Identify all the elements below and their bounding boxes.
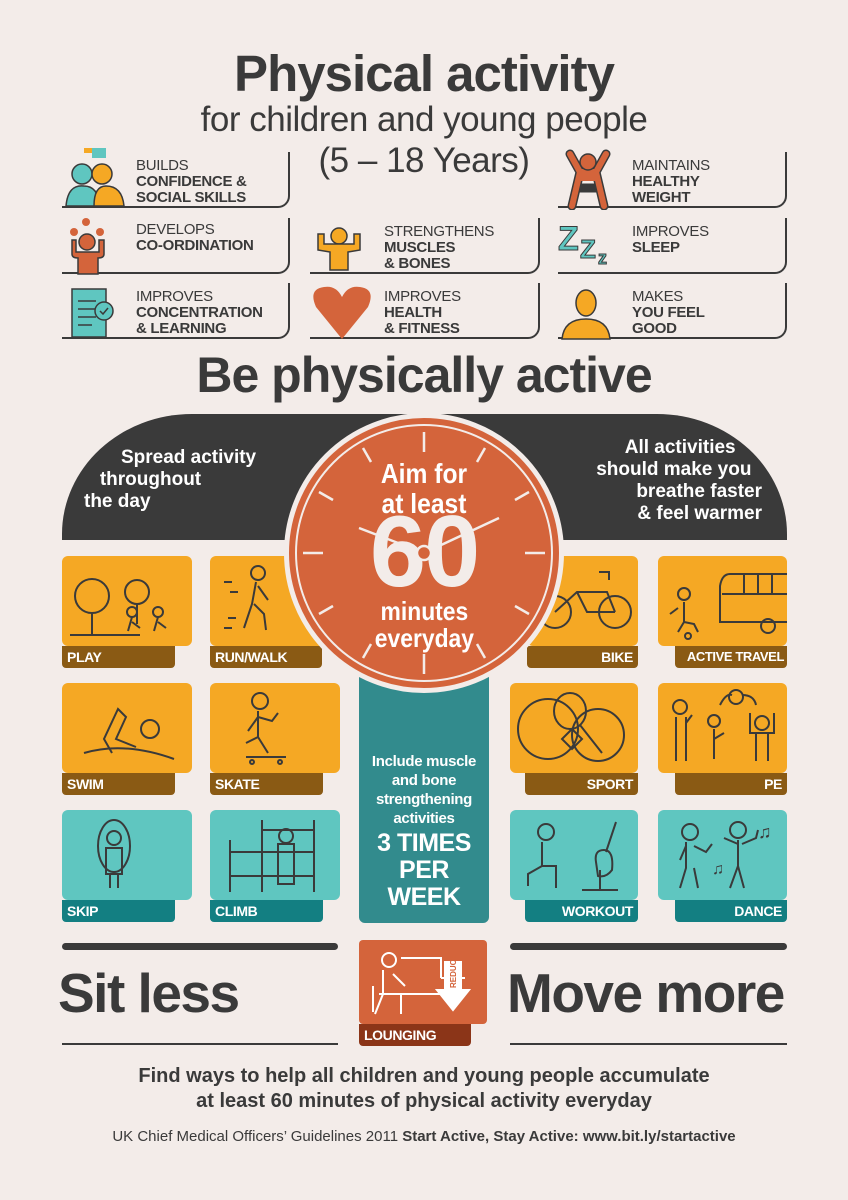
benefit: health: HEALTH bbox=[384, 304, 442, 321]
subtitle bbox=[201, 100, 647, 180]
subtitle: (5 – 18 Years) bbox=[319, 141, 529, 180]
benefit: concentration: CONCENTRATION bbox=[136, 304, 263, 321]
benefit: sleep: Z bbox=[580, 234, 596, 264]
footer message: Find ways to help all children and young people accumulate bbox=[138, 1065, 710, 1087]
subtitle: for children and young people bbox=[201, 100, 647, 139]
text: spread activity: the day bbox=[84, 491, 151, 512]
benefit: weight: WEIGHT bbox=[632, 189, 690, 206]
benefit: weight bbox=[558, 152, 787, 208]
benefit: coordination bbox=[62, 218, 290, 274]
benefit: sleep: z bbox=[598, 248, 607, 268]
title: Physical activity bbox=[234, 45, 614, 102]
tile: play: PLAY bbox=[67, 649, 101, 665]
tile: skip: SKIP bbox=[67, 903, 98, 919]
benefit: sleep: SLEEP bbox=[632, 239, 680, 256]
benefit: confidence bbox=[62, 152, 290, 208]
benefit: confidence: SOCIAL SKILLS bbox=[136, 189, 246, 206]
text: all activities: All activities bbox=[625, 437, 736, 458]
panel: muscle and bone strengthening: Include muscle bbox=[372, 753, 476, 770]
panel: muscle and bone strengthening: and bone bbox=[392, 772, 456, 789]
tile: swim bbox=[62, 683, 192, 795]
credits: UK Chief Medical Officers’ Guidelines 2011 Start Active, Stay Active: www.bit.ly/startactive bbox=[112, 1128, 736, 1145]
tile: skip bbox=[62, 810, 192, 922]
benefit: health bbox=[310, 283, 540, 339]
tile: bike bbox=[527, 556, 638, 668]
heading: move more: Move more bbox=[507, 962, 784, 1024]
tile: run/walk: RUN/WALK bbox=[215, 649, 287, 665]
tile: swim: SWIM bbox=[67, 776, 104, 792]
benefit: feel good: YOU FEEL bbox=[632, 304, 705, 321]
tile: play bbox=[62, 556, 192, 668]
benefit: concentration: IMPROVES bbox=[136, 288, 213, 305]
tile: dance: DANCE bbox=[734, 903, 782, 919]
tile: climb: CLIMB bbox=[215, 903, 257, 919]
clock: aim for 60 minutes bbox=[284, 413, 564, 693]
benefit: feel good: MAKES bbox=[632, 288, 683, 305]
clock: aim for 60 minutes: at least bbox=[382, 488, 466, 519]
tile: pe: PE bbox=[764, 776, 782, 792]
benefit: sleep bbox=[558, 218, 787, 274]
dark arch panel bbox=[62, 414, 787, 540]
tile: pe bbox=[658, 683, 787, 795]
panel: muscle and bone strengthening: strengthening bbox=[376, 791, 472, 808]
tile: dance: ♫ bbox=[758, 822, 772, 842]
panel: muscle and bone strengthening: WEEK bbox=[388, 883, 460, 911]
benefit: weight: MAINTAINS bbox=[632, 157, 710, 174]
panel: muscle and bone strengthening: PER bbox=[399, 856, 449, 884]
benefit: muscles: & BONES bbox=[384, 255, 450, 272]
benefit: muscles: STRENGTHENS bbox=[384, 223, 494, 240]
tile: active travel bbox=[658, 556, 787, 668]
tile: lounging: LOUNGING bbox=[364, 1027, 436, 1043]
benefit: sleep: Z bbox=[558, 220, 579, 258]
text: spread activity: Spread activity bbox=[121, 447, 256, 468]
tile: skate bbox=[210, 683, 340, 795]
benefit: confidence: CONFIDENCE & bbox=[136, 173, 247, 190]
footer message: at least 60 minutes of physical activity everyday bbox=[196, 1090, 652, 1112]
tile: lounging: REDUCE bbox=[449, 954, 458, 988]
benefit: coordination: CO-ORDINATION bbox=[136, 237, 253, 254]
text: all activities: should make you bbox=[596, 459, 751, 480]
benefit: health: IMPROVES bbox=[384, 288, 461, 305]
tile: lounging bbox=[359, 940, 487, 1046]
benefit: confidence: BUILDS bbox=[136, 157, 188, 174]
tile: sport bbox=[510, 683, 638, 795]
tile: bike: BIKE bbox=[601, 649, 633, 665]
benefit: muscles bbox=[310, 218, 540, 274]
footer message bbox=[138, 1065, 710, 1112]
heading: sit less: Sit less bbox=[58, 962, 239, 1024]
clock: aim for 60 minutes: minutes bbox=[380, 596, 468, 626]
text: all activities bbox=[596, 437, 762, 524]
benefit: feel good bbox=[558, 283, 787, 339]
tile: workout: WORKOUT bbox=[562, 903, 633, 919]
panel: muscle and bone strengthening: activities bbox=[393, 810, 455, 827]
tile: active travel: ACTIVE TRAVEL bbox=[687, 649, 784, 664]
benefit: coordination: DEVELOPS bbox=[136, 221, 214, 238]
benefit: weight: HEALTHY bbox=[632, 173, 700, 190]
tile: dance bbox=[658, 810, 787, 922]
heading: be physically active: Be physically active bbox=[196, 347, 652, 403]
clock: aim for 60 minutes: everyday bbox=[374, 623, 474, 653]
benefit: feel good: GOOD bbox=[632, 320, 677, 337]
tile: run/walk bbox=[210, 556, 322, 668]
benefit: concentration: & LEARNING bbox=[136, 320, 226, 337]
text: all activities: & feel warmer bbox=[637, 503, 762, 524]
clock: aim for 60 minutes: 60 bbox=[370, 496, 478, 608]
tile: workout bbox=[510, 810, 638, 922]
rules bbox=[62, 943, 338, 950]
tile: sport: SPORT bbox=[587, 776, 633, 792]
benefit: muscles: MUSCLES bbox=[384, 239, 455, 256]
benefit: health: & FITNESS bbox=[384, 320, 460, 337]
clock: aim for 60 minutes: Aim for bbox=[381, 458, 467, 489]
tile: skate: SKATE bbox=[215, 776, 259, 792]
text: all activities: breathe faster bbox=[636, 481, 762, 502]
panel: muscle and bone strengthening bbox=[359, 640, 489, 923]
text: spread activity: throughout bbox=[100, 469, 201, 490]
benefit: sleep: IMPROVES bbox=[632, 223, 709, 240]
tile: dance: ♫ bbox=[712, 861, 724, 878]
panel: muscle and bone strengthening: 3 TIMES bbox=[377, 829, 471, 857]
text: spread activity bbox=[84, 447, 256, 512]
tile: climb bbox=[210, 810, 340, 922]
benefit: concentration bbox=[62, 283, 290, 339]
